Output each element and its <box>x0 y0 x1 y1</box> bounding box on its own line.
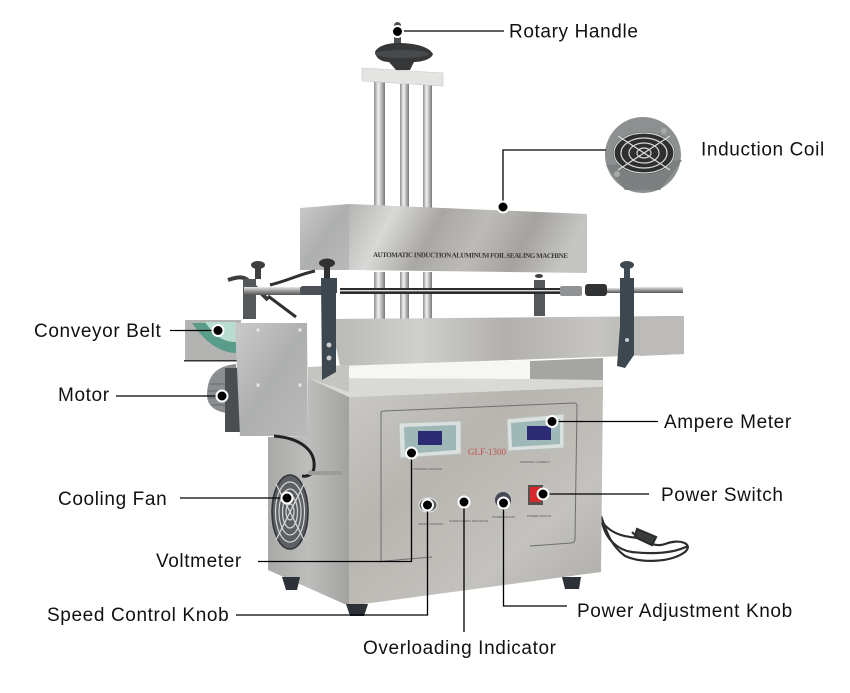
callout: Power Adjustment Knob <box>498 498 793 622</box>
callout: Power Adjustment Knob: Power Adjustment Knob <box>577 601 793 622</box>
lifting columns <box>374 82 432 320</box>
machine illustration <box>184 22 688 616</box>
conveyor left end with belt <box>184 320 241 362</box>
motor <box>207 364 240 432</box>
callout: Motor: Motor <box>58 385 110 406</box>
panel small captions: SPEED CONTROL <box>418 522 444 526</box>
fan cable <box>274 436 314 476</box>
speed control knob <box>419 498 437 512</box>
callout: Cooling Fan <box>58 489 292 510</box>
ampere meter display <box>507 414 564 451</box>
callout: Ampere Meter: Ampere Meter <box>664 412 792 433</box>
callout: Overloading Indicator: Overloading Indicator <box>363 638 557 659</box>
machine title on head: AUTOMATIC INDUCTION ALUMINUM FOIL SEALING MACHINE <box>373 251 568 260</box>
callout: Overloading Indicator <box>363 496 557 659</box>
base side panel <box>268 378 349 606</box>
callout: Conveyor Belt: Conveyor Belt <box>34 321 161 342</box>
sealing head front <box>349 204 587 273</box>
callout: Rotary Handle: Rotary Handle <box>509 22 639 42</box>
machine feet <box>282 577 581 616</box>
panel small captions: WORKING CURRENT <box>520 460 550 464</box>
callout: Speed Control Knob: Speed Control Knob <box>47 605 229 626</box>
panel small captions <box>413 460 551 526</box>
callout: Induction Coil: Induction Coil <box>701 140 825 160</box>
callout: Rotary Handle <box>392 22 639 42</box>
callout: Cooling Fan: Cooling Fan <box>58 489 167 510</box>
control panel outline <box>381 403 577 546</box>
top mounting plate <box>362 68 443 86</box>
motor housing <box>235 323 308 436</box>
callout: Speed Control Knob <box>47 500 433 626</box>
callout: Induction Coil <box>498 140 825 212</box>
base front panel <box>349 387 603 606</box>
panel small captions: OVERLOADING INDICATOR <box>449 519 489 523</box>
base top face <box>308 378 603 397</box>
callout: Power Switch: Power Switch <box>661 485 784 506</box>
voltmeter display <box>399 421 461 458</box>
callout: Motor <box>58 385 228 406</box>
guide brackets <box>321 278 634 380</box>
panel small captions: POWER ADJUST <box>492 515 516 519</box>
rotary handle wheel <box>375 22 433 70</box>
panel small captions: WORKING VOLTAGE <box>413 467 442 471</box>
power switch <box>528 485 543 505</box>
induction coil inset <box>605 117 682 193</box>
sealing head side <box>300 204 349 270</box>
panel small captions: POWER SWITCH <box>527 514 551 518</box>
guide rail assembly <box>228 258 683 319</box>
callout: Voltmeter <box>156 448 417 572</box>
callout: Ampere Meter <box>546 412 792 433</box>
power cord <box>601 516 688 561</box>
callout: Conveyor Belt <box>34 321 224 342</box>
power adjustment knob <box>495 492 511 508</box>
cooling fan <box>272 475 308 549</box>
conveyor body <box>330 316 684 366</box>
support bracket below conveyor <box>308 365 349 392</box>
under-conveyor plate <box>349 360 530 383</box>
callout: Voltmeter: Voltmeter <box>156 551 242 572</box>
callout: Power Switch <box>538 485 784 506</box>
model label: GLF-1300 <box>468 447 506 457</box>
